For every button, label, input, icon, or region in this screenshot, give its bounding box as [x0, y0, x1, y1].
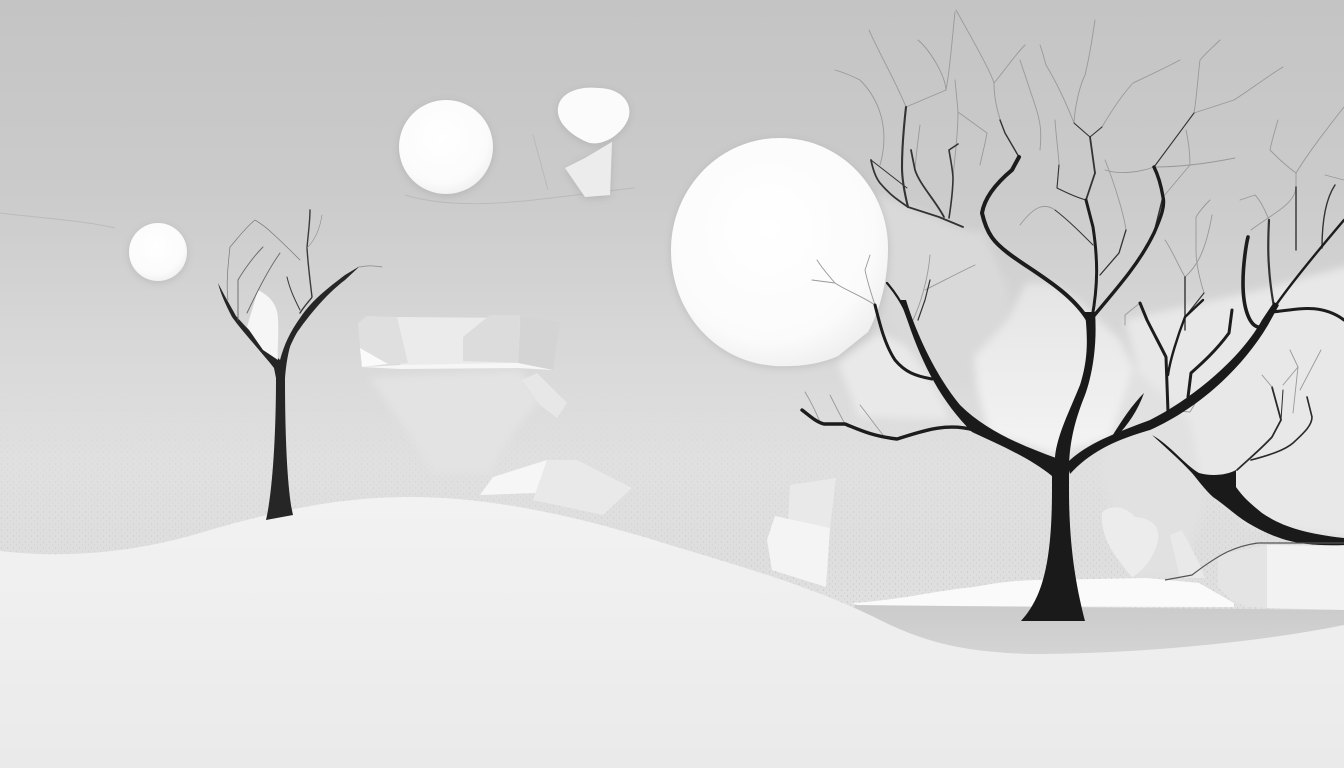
torn paper shelf centre	[358, 315, 567, 418]
right tree twigs	[1262, 350, 1321, 413]
torn paper piece right of hill	[767, 478, 836, 587]
ground shadow right	[800, 605, 1344, 768]
large tree left limb	[900, 300, 1056, 476]
snow ledge right	[852, 578, 1234, 607]
right side small tree	[1152, 350, 1344, 545]
small tree branches	[227, 210, 382, 320]
large moon	[671, 138, 888, 366]
hanging fragment	[522, 373, 567, 418]
dotted texture band	[1, 452, 1343, 608]
paper block far right	[1218, 545, 1344, 610]
large tree trunk and central limb	[1021, 312, 1096, 621]
faint paper shape under centre shelf	[370, 370, 540, 473]
small tree	[218, 210, 382, 520]
foreground hill	[0, 497, 1344, 768]
small tree limbs over leaf	[235, 318, 276, 368]
large tree spike branch	[1111, 393, 1144, 438]
right fold	[518, 317, 560, 370]
faint thin lines	[0, 135, 635, 228]
small tree leaf	[247, 290, 278, 360]
small tree trunk and limbs	[218, 266, 360, 520]
white wedge	[360, 348, 388, 367]
large tree right limb	[1067, 302, 1279, 474]
large tree heavy upper branches	[802, 157, 1344, 439]
middle fold	[463, 315, 520, 363]
left fold	[358, 316, 408, 365]
paper blob top	[558, 88, 629, 197]
large tree	[802, 10, 1344, 621]
pale paper shapes behind large tree	[838, 193, 1344, 577]
medium moon	[399, 100, 493, 194]
shelf edge	[362, 363, 553, 370]
small moon left	[129, 223, 187, 281]
paper hearts lower right	[1102, 507, 1205, 578]
thin branch over paper block	[1165, 543, 1344, 580]
shelf backing	[397, 317, 520, 366]
large tree medium branches	[871, 107, 1335, 330]
right tree limb	[1152, 435, 1344, 545]
large tree thin twigs	[805, 10, 1344, 435]
torn paper pieces near hill crest	[480, 460, 632, 515]
right tree branches	[1237, 387, 1312, 470]
